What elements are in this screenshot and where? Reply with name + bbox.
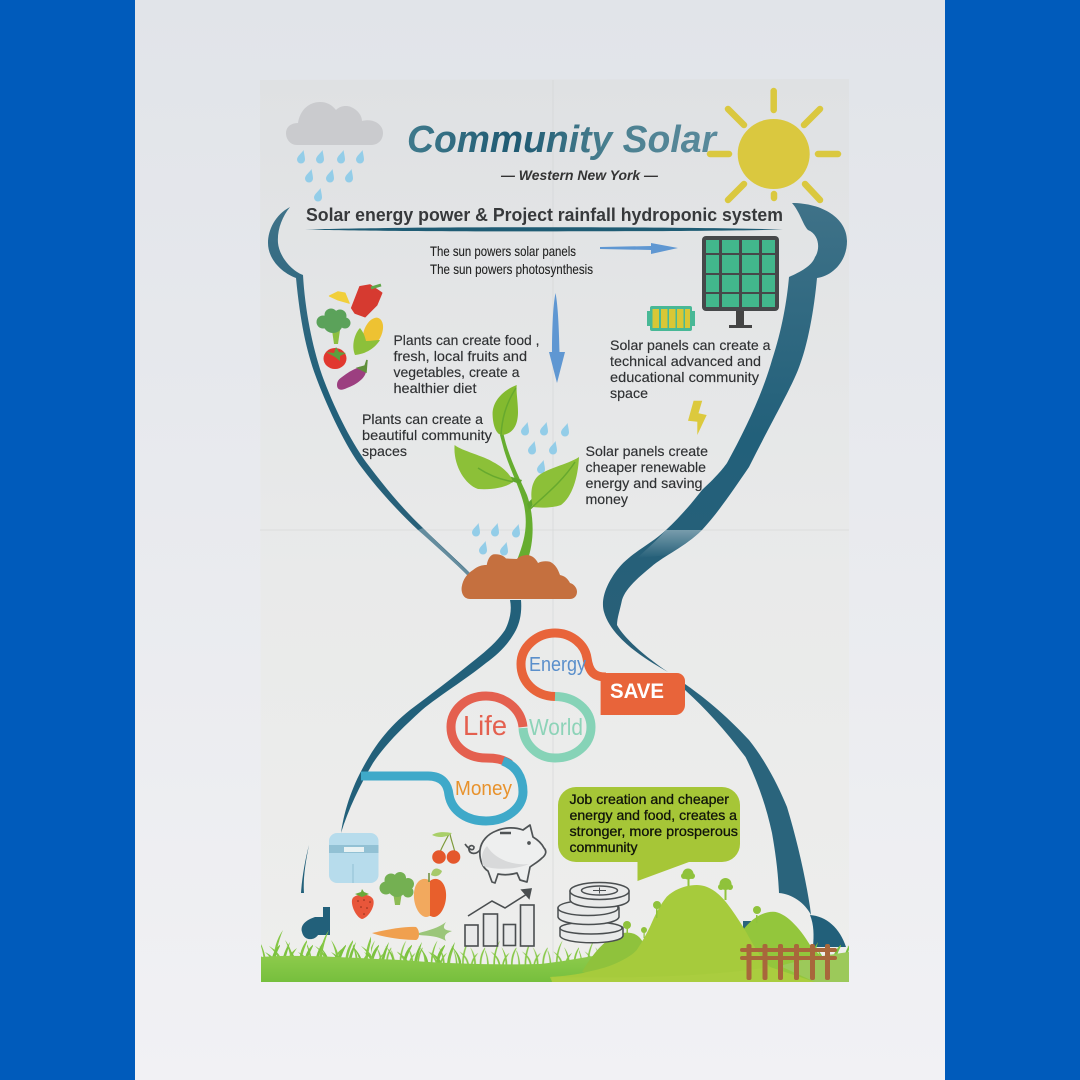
icon: wooden fence — [740, 944, 837, 980]
text: solar panels technical: space — [610, 385, 648, 401]
loop: life — [451, 696, 523, 764]
icon: strawberry — [352, 889, 374, 919]
save tag: SAVE — [610, 680, 664, 703]
text: plants create food: Plants can create food , — [394, 332, 540, 348]
speech bubble: Job creation and cheaper — [570, 791, 729, 807]
icon: bar chart sketch — [465, 889, 534, 946]
hourglass outline — [268, 203, 847, 947]
leaf right — [531, 457, 579, 508]
icon: carrot — [372, 922, 452, 941]
loops diagram — [361, 633, 685, 821]
broccoli — [316, 308, 350, 344]
small dark patch behind hill — [743, 921, 751, 929]
loop: energy — [521, 633, 606, 696]
trees — [623, 868, 761, 938]
hills and trees — [550, 868, 849, 982]
fold highlight on left curve — [418, 528, 472, 577]
tomato — [324, 347, 346, 369]
icon: sun — [710, 91, 838, 200]
icon: battery — [647, 306, 695, 331]
arrow: sun to solar panel — [600, 243, 678, 254]
loop: world — [523, 696, 591, 758]
right foot — [810, 915, 846, 947]
text: plants create food: vegetables, create a — [394, 364, 520, 380]
big hill — [550, 885, 783, 982]
loop: money — [361, 761, 523, 821]
left lower sliver — [301, 845, 309, 893]
leaf veins — [478, 388, 575, 512]
subtitle: — Western New York — — [500, 167, 659, 183]
right blue border — [945, 0, 1080, 1080]
right green patch — [780, 952, 849, 982]
save tag — [601, 673, 685, 715]
text: the sun powers: The sun powers photosynthesis — [430, 261, 593, 277]
text: solar panels technical: Solar panels can create a — [610, 337, 771, 353]
solid turf — [261, 955, 650, 982]
grass strip — [261, 922, 849, 982]
text: cheaper energy: cheaper renewable — [586, 459, 706, 475]
text: solar panels technical: educational community — [610, 369, 759, 385]
text: beautiful spaces: spaces — [362, 443, 407, 459]
speech bubble: energy and food, creates a — [570, 807, 737, 823]
icon: solar panel — [702, 236, 779, 328]
text: beautiful spaces: Plants can create a — [362, 411, 483, 427]
text: plants create food: fresh, local fruits and — [394, 348, 527, 364]
speech bubble — [558, 787, 740, 881]
main heading: Solar energy power & Project rainfall hydroponic system — [306, 204, 783, 225]
label: life: Life — [463, 710, 507, 741]
leaf left — [454, 445, 513, 489]
text: cheaper energy: money — [586, 491, 628, 507]
left lower band — [341, 600, 521, 833]
text: beautiful spaces — [362, 411, 492, 459]
label: energy: Energy — [529, 654, 586, 676]
leaf top — [493, 385, 518, 435]
wall background — [135, 0, 945, 1080]
icon: lightning bolt — [688, 401, 707, 435]
icon: cherries — [432, 832, 460, 864]
icon: piggy bank — [465, 825, 546, 883]
tall blades, left — [261, 922, 371, 966]
icon: seedling — [454, 385, 579, 562]
small left hill — [582, 933, 660, 978]
label: money: Money — [455, 778, 512, 800]
text: solar panels technical — [610, 337, 771, 401]
lemon — [329, 292, 349, 303]
right upper band — [603, 203, 847, 672]
poster sheet — [260, 79, 849, 982]
speech bubble: stronger, more prosperous — [570, 823, 738, 839]
text: plants create food — [394, 332, 540, 396]
text: solar panels technical: technical advanced and — [610, 353, 761, 369]
text: the sun powers — [430, 243, 593, 277]
blades, right — [810, 932, 849, 966]
short blades, centre — [371, 935, 606, 966]
text: cheaper energy: energy and saving — [586, 475, 702, 491]
corn — [353, 315, 387, 355]
speech bubble: community — [570, 839, 638, 855]
arrow: sun to plant — [549, 293, 565, 383]
text: the sun powers: The sun powers solar panels — [430, 243, 576, 259]
eggplant — [337, 360, 367, 390]
text: cheaper energy — [586, 443, 708, 507]
stem — [500, 434, 533, 562]
icon: soil mound — [462, 554, 577, 599]
pepper — [352, 285, 382, 317]
icon: blue device — [329, 833, 378, 883]
fold highlight on right band — [637, 530, 702, 558]
icon: apple — [414, 868, 446, 917]
icon: coin stack — [558, 882, 629, 943]
rain drops over plant — [472, 422, 569, 556]
icon: rain cloud — [286, 102, 383, 202]
title: Community Solar — [407, 119, 718, 161]
second hill — [743, 912, 830, 982]
left blue border — [0, 0, 135, 1080]
text: plants create food: healthier diet — [394, 380, 477, 396]
right lower band — [685, 684, 811, 915]
branch stems — [484, 468, 555, 510]
lower ground — [552, 967, 815, 982]
label: world: World — [529, 714, 583, 740]
text: cheaper energy: Solar panels create — [586, 443, 708, 459]
icon: broccoli — [380, 872, 414, 905]
icon: vegetables group — [316, 285, 387, 390]
text: beautiful spaces: beautiful community — [362, 427, 492, 443]
left upper curve — [268, 207, 472, 577]
left foot — [302, 907, 330, 939]
